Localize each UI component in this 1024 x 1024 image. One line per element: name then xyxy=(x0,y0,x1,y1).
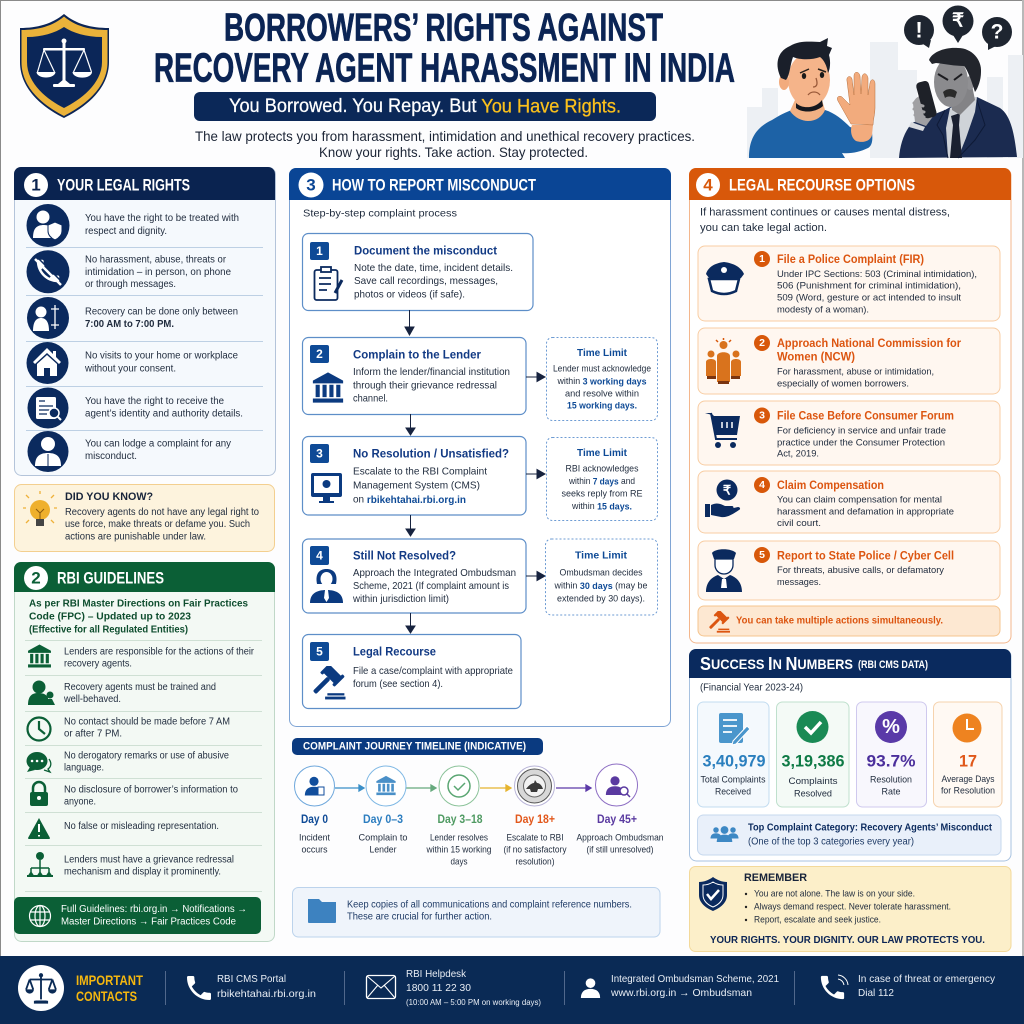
icon: speech bubbles: ? xyxy=(991,20,1003,44)
section 1 heading xyxy=(14,167,275,200)
step 5 box xyxy=(302,634,521,708)
day 3-18: within 15 working xyxy=(426,844,492,854)
option 2: especially of women borrowers. xyxy=(777,378,909,390)
contact: CMS portal: rbikehtahai.rbi.org.in xyxy=(217,988,316,1000)
icon: trained agent xyxy=(28,680,55,705)
time limit 2 xyxy=(546,338,658,420)
guideline: disclosure xyxy=(64,784,238,808)
option 3 xyxy=(698,401,1000,465)
step 3 box: Escalate to the RBI Complaint xyxy=(353,466,487,478)
day 0-3: Day 0–3 xyxy=(363,814,403,826)
icon: speech bubble xyxy=(26,752,51,772)
step 2 box: channel. xyxy=(353,394,388,404)
process subtitle: Step-by-step complaint process xyxy=(303,208,457,220)
arrow xyxy=(526,572,545,580)
day 18+: (if no satisfactory xyxy=(504,844,567,854)
option 3: Act, 2019. xyxy=(777,448,819,460)
right: no visits xyxy=(84,350,238,374)
step 5 box: 5 xyxy=(316,644,323,658)
step 1 box: Document the misconduct xyxy=(354,244,497,258)
step 5 box: forum (see section 4). xyxy=(353,679,443,690)
section 4 heading: LEGAL RECOURSE OPTIONS xyxy=(729,176,915,194)
contact: ombudsman: www.rbi.org.in → Ombudsman xyxy=(610,987,752,999)
subtitle: Know your rights. Take action. Stay protected. xyxy=(319,144,588,160)
stat: total complaints: 3,40,979 xyxy=(702,752,766,770)
title xyxy=(154,6,735,90)
step 4 box: Still Not Resolved? xyxy=(353,548,456,562)
icon: clipboard xyxy=(314,267,342,300)
option 2: 2 xyxy=(759,337,765,349)
callout: remember: YOUR RIGHTS. YOUR DIGNITY. OUR LAW PROTECTS YOU. xyxy=(710,934,985,946)
icon: person and time xyxy=(27,297,69,339)
icon: speech bubbles: ! xyxy=(915,18,923,42)
step 2 box: Complain to the Lender xyxy=(353,348,481,362)
right: recovery hours xyxy=(85,306,238,330)
header shield logo xyxy=(20,14,109,118)
right: no visits: No visits to your home or workplace xyxy=(85,350,238,362)
icon: complainant xyxy=(28,431,68,472)
icon: house xyxy=(26,342,68,384)
callout: remember xyxy=(690,866,1011,952)
panel: RBI guidelines xyxy=(14,562,275,942)
contact: CMS portal xyxy=(187,973,316,1000)
right: agent identity xyxy=(85,396,243,420)
illustration: city skyline xyxy=(747,42,1023,158)
recourse intro xyxy=(700,206,950,234)
option 4 xyxy=(698,471,1000,533)
right: respect: respect and dignity. xyxy=(85,226,167,237)
top complaint category xyxy=(698,815,1001,855)
note: keep copies: Keep copies of all communications and complaint reference numbers. xyxy=(347,900,632,910)
recourse intro: If harassment continues or causes mental distress, xyxy=(700,206,950,218)
option 3: practice under the Consumer Protection xyxy=(777,438,945,448)
subtitle xyxy=(195,128,695,160)
guideline: abusive language xyxy=(64,750,229,774)
contact: helpdesk: RBI Helpdesk xyxy=(406,968,467,980)
icon: bank green xyxy=(28,645,51,667)
illustration: angry recovery agent xyxy=(899,48,1017,158)
title: RECOVERY AGENT HARASSMENT IN INDIA xyxy=(154,44,735,90)
icon: no phone calls xyxy=(26,250,70,293)
stat: resolution rate: 93.7% xyxy=(866,752,916,770)
option 2: For harassment, abuse or intimidation, xyxy=(777,366,934,378)
panel: how to report misconduct xyxy=(289,168,671,726)
time limit 4: Time Limit xyxy=(575,550,627,562)
icon: folder xyxy=(308,899,336,923)
right: respect xyxy=(85,213,239,237)
guideline: lenders responsible: Lenders are responsible for the actions of their xyxy=(64,646,255,658)
step 4 box xyxy=(302,539,526,613)
option 4: 4 xyxy=(759,479,765,491)
stat: average days: for Resolution xyxy=(941,786,995,796)
stat: total complaints: Total Complaints xyxy=(700,774,766,786)
did you know text: DID YOU KNOW? xyxy=(65,491,153,503)
stat: total complaints xyxy=(698,702,769,807)
option 1: Under IPC Sections: 503 (Criminal intimidation), xyxy=(777,269,977,280)
option 2: Women (NCW) xyxy=(777,350,855,364)
contact: helpdesk: (10:00 AM – 5:00 PM on working days) xyxy=(406,997,541,1007)
step 1 box: Note the date, time, incident details. xyxy=(354,263,513,274)
option 2 xyxy=(698,328,1000,394)
step 4 box: Scheme, 2021 (If complaint amount is xyxy=(353,581,509,592)
timeline heading xyxy=(292,738,543,755)
did you know text: use force, make threats or defame you. Such xyxy=(65,519,250,530)
stat: average days: Average Days xyxy=(942,774,995,785)
right: recovery hours: 7:00 AM to 7:00 PM. xyxy=(85,319,174,330)
success heading: SUCCESS IN NUMBERS xyxy=(700,654,853,674)
timeline heading: COMPLAINT JOURNEY TIMELINE (INDICATIVE) xyxy=(303,740,526,752)
arrow xyxy=(406,613,415,633)
option 1: 1 xyxy=(759,253,765,265)
day 0 xyxy=(294,766,334,854)
right: recovery hours: Recovery can be done only between xyxy=(85,306,238,318)
guideline: lenders responsible xyxy=(64,646,255,670)
guidelines intro: (Effective for all Regulated Entities) xyxy=(29,624,188,636)
stat: complaints resolved: Complaints xyxy=(788,776,838,787)
contact: helpdesk: 1800 11 22 30 xyxy=(406,982,471,994)
day 0-3: Complain to xyxy=(358,832,408,842)
guideline: trained agents xyxy=(63,682,216,705)
time limit 3 xyxy=(546,438,658,520)
option 1: 509 (Word, gesture or act intended to insult xyxy=(777,292,961,304)
time limit 3: seeks reply from RE xyxy=(562,488,642,500)
right: respect: You have the right to be treated with xyxy=(85,213,239,224)
day 3-18: Lender resolves xyxy=(430,832,488,842)
complaint journey timeline xyxy=(292,738,664,866)
day 18+ xyxy=(504,766,567,866)
contact: emergency: In case of threat or emergency xyxy=(858,973,996,985)
step 4 box: 4 xyxy=(316,548,323,562)
section 2 heading: RBI GUIDELINES xyxy=(57,568,164,588)
time limit 2: Lender must acknowledge xyxy=(553,364,651,374)
time limit 4: extended by 30 days). xyxy=(557,594,645,604)
success heading: (RBI CMS DATA) xyxy=(858,659,928,671)
step 1 box: photos or videos (if safe). xyxy=(354,290,465,300)
tagline pill: You Borrowed. You Repay. But You Have Rights. xyxy=(229,96,621,117)
full guidelines bar xyxy=(14,897,261,934)
guideline: grievance xyxy=(64,854,234,878)
icon: padlock xyxy=(30,782,48,806)
guideline: disclosure: anyone. xyxy=(64,796,96,808)
note: keep copies xyxy=(292,888,660,937)
step 4 box: within jurisdiction limit) xyxy=(352,594,449,605)
contact: helpdesk xyxy=(366,968,541,1007)
contact: ombudsman xyxy=(581,973,779,999)
callout: remember: Report, escalate and seek justice. xyxy=(754,914,881,926)
time limit 2: Time Limit xyxy=(577,347,627,359)
full guidelines bar: Full Guidelines: rbi.org.in → Notifications → xyxy=(61,904,247,915)
icon: speech bubbles: ₹ xyxy=(952,10,964,32)
right: lodge complaint: misconduct. xyxy=(85,451,137,462)
callout: remember: You are not alone. The law is on your side. xyxy=(754,888,915,900)
note: keep copies: These are crucial for further action. xyxy=(347,912,492,922)
title: BORROWERS’ RIGHTS AGAINST xyxy=(224,6,663,50)
day 0: Incident xyxy=(299,832,330,842)
option 3: File Case Before Consumer Forum xyxy=(777,408,954,422)
did you know text: Recovery agents do not have any legal right to xyxy=(65,507,259,518)
option 4: You can claim compensation for mental xyxy=(777,494,942,506)
option 3: 3 xyxy=(759,410,765,422)
step 5 box: File a case/complaint with appropriate xyxy=(353,666,513,677)
subtitle: The law protects you from harassment, intimidation and unethical recovery practices. xyxy=(195,128,695,144)
step 4 box: Approach the Integrated Ombudsman xyxy=(353,568,516,579)
day 0-3: Lender xyxy=(370,844,396,854)
stat: total complaints: Received xyxy=(715,786,751,798)
icon: shield check xyxy=(699,877,727,911)
icon: warning triangle xyxy=(28,818,50,839)
day 45+: Day 45+ xyxy=(597,814,637,826)
day 45+ xyxy=(576,764,664,854)
stat: complaints resolved xyxy=(776,702,849,807)
option 5 xyxy=(698,541,1000,600)
section 2 heading: 2 xyxy=(31,568,41,588)
arrow xyxy=(405,310,414,335)
guideline: lenders responsible: recovery agents. xyxy=(64,658,132,670)
option 1: File a Police Complaint (FIR) xyxy=(777,252,924,266)
tagline pill xyxy=(194,92,656,121)
time limit 4 xyxy=(546,539,658,615)
contact: emergency xyxy=(821,973,996,999)
icon: rupee in hand xyxy=(705,480,740,517)
day 45+: (if still unresolved) xyxy=(586,844,654,854)
arrow xyxy=(406,414,415,435)
time limit 2: 15 working days. xyxy=(567,400,637,412)
time limit 2: within 3 working days xyxy=(557,376,646,387)
stat: resolution rate xyxy=(856,702,926,807)
time limit 2: and resolve within xyxy=(565,388,639,400)
success heading xyxy=(689,649,1011,678)
option 5: messages. xyxy=(777,577,821,588)
option 5: Report to State Police / Cyber Cell xyxy=(777,548,954,562)
recourse intro: you can take legal action. xyxy=(700,222,827,234)
timeline arrows xyxy=(335,785,591,791)
icon: document and pen xyxy=(719,713,750,745)
option 4: civil court. xyxy=(777,518,821,529)
financial year: (Financial Year 2023-24) xyxy=(700,682,803,694)
footer heading: IMPORTANT xyxy=(76,972,143,988)
icon: monitor xyxy=(311,473,342,503)
step 1 box xyxy=(302,234,533,310)
icon: clock xyxy=(28,718,50,740)
stat: average days: 17 xyxy=(959,752,977,770)
illustration: borrower raising hand xyxy=(749,38,875,158)
callout: remember: REMEMBER xyxy=(744,872,807,884)
day 18+: Escalate to RBI xyxy=(506,832,564,842)
time limit 4: within 30 days (may be xyxy=(554,580,648,592)
right: agent identity: agent’s identity and authority details. xyxy=(85,408,243,420)
stat: resolution rate: Resolution xyxy=(870,774,912,786)
right: lodge complaint xyxy=(85,438,231,462)
section 4 heading xyxy=(689,168,1011,200)
section 1 heading: YOUR LEGAL RIGHTS xyxy=(57,176,190,194)
option 4: Claim Compensation xyxy=(777,478,884,492)
day 0: occurs xyxy=(302,844,328,854)
section 3 heading: HOW TO REPORT MISCONDUCT xyxy=(332,176,536,194)
day 3-18: Day 3–18 xyxy=(438,814,483,826)
day 45+: Approach Ombudsman xyxy=(576,832,664,842)
option 5: 5 xyxy=(759,549,765,561)
option 3: For deficiency in service and unfair trade xyxy=(777,426,946,436)
stat: average days xyxy=(934,702,1002,807)
icon: speech bubbles xyxy=(904,6,1012,50)
right: agent identity: You have the right to receive the xyxy=(85,396,224,407)
icon: police cap xyxy=(706,262,744,294)
full guidelines bar: Master Directions → Fair Practices Code xyxy=(61,916,236,928)
step 3 box xyxy=(302,436,526,515)
guidelines intro: Code (FPC) – Updated up to 2023 xyxy=(29,612,191,622)
right: no harassment xyxy=(85,254,231,290)
day 18+: resolution) xyxy=(516,856,554,866)
option 4: harassment and defamation in appropriate xyxy=(777,506,954,518)
guideline: contact hours: or after 7 PM. xyxy=(64,728,122,740)
guideline: abusive language: No derogatory remarks or use of abusive xyxy=(64,750,229,762)
icon: ombudsman xyxy=(310,569,343,603)
icon: light bulb xyxy=(23,491,57,526)
footer logo xyxy=(18,965,64,1011)
contact: emergency: Dial 112 xyxy=(858,987,894,999)
guidelines intro xyxy=(29,598,248,636)
icon: women group xyxy=(706,338,741,384)
step 1 box: Save call recordings, messages, xyxy=(354,276,498,287)
option 2: Approach National Commission for xyxy=(777,336,961,350)
step 3 box: No Resolution / Unsatisfied? xyxy=(353,446,509,460)
arrow xyxy=(526,470,545,478)
arrow xyxy=(526,372,545,382)
time limit 3: within 7 days and xyxy=(568,476,635,487)
stat: resolution rate: Rate xyxy=(882,786,900,798)
right: no harassment: intimidation – in person, on phone xyxy=(85,267,231,278)
day 3-18: days xyxy=(450,856,468,866)
option 5: For threats, abusive calls, or defamatory xyxy=(777,565,944,576)
guidelines intro: As per RBI Master Directions on Fair Practices xyxy=(29,598,248,610)
step 2 box: 2 xyxy=(316,347,323,361)
top complaint category: Top Complaint Category: Recovery Agents’ Misconduct xyxy=(748,822,993,834)
icon: police officer xyxy=(706,549,742,592)
contact: CMS portal: RBI CMS Portal xyxy=(217,973,286,985)
footer heading: CONTACTS xyxy=(76,988,137,1004)
icon: scales of justice xyxy=(36,38,92,87)
time limit 3: within 15 days. xyxy=(571,501,632,512)
footer: important contacts xyxy=(0,956,1024,1024)
option 1 xyxy=(698,246,1000,321)
stat: complaints resolved: Resolved xyxy=(794,788,832,800)
icon: rupee in hand: ₹ xyxy=(723,482,732,498)
icon: bank xyxy=(313,372,343,403)
right: no harassment: or through messages. xyxy=(85,279,176,290)
time limit 4: Ombudsman decides xyxy=(560,568,643,578)
step 1 box: 1 xyxy=(316,244,323,258)
arrow xyxy=(406,515,415,536)
right: no harassment: No harassment, abuse, threats or xyxy=(85,254,227,266)
option 1: modesty of a woman). xyxy=(777,304,869,316)
step 2 box: Inform the lender/financial institution xyxy=(353,367,510,378)
icon: shopping cart xyxy=(705,413,740,448)
guideline: misleading: No false or misleading representation. xyxy=(64,821,219,832)
icon: hierarchy xyxy=(27,852,53,877)
panel: legal recourse options xyxy=(689,168,1011,643)
option 1: 506 (Punishment for criminal intimidation), xyxy=(777,280,961,292)
section 2 heading xyxy=(14,562,275,592)
guideline: abusive language: language. xyxy=(64,762,104,774)
guideline: trained agents: well-behaved. xyxy=(63,694,121,705)
guideline: disclosure: No disclosure of borrower’s information to xyxy=(64,784,238,796)
icon: people group xyxy=(710,826,738,842)
right: no visits: without your consent. xyxy=(84,364,176,374)
section 3 heading xyxy=(289,168,671,200)
step 3 box: 3 xyxy=(316,446,323,460)
day 0: Day 0 xyxy=(301,814,328,826)
step 3 box: Management System (CMS) xyxy=(353,480,480,492)
callout: remember: Always demand respect. Never tolerate harassment. xyxy=(754,902,951,912)
step 2 box: through their grievance redressal xyxy=(353,380,497,392)
step 5 box: Legal Recourse xyxy=(353,644,436,658)
contact: ombudsman: Integrated Ombudsman Scheme, 2021 xyxy=(611,973,779,985)
panel: your legal rights xyxy=(14,167,276,476)
guideline: grievance: mechanism and display it prominently. xyxy=(64,866,221,878)
guideline: contact hours xyxy=(64,716,230,740)
did you know text xyxy=(65,491,259,542)
icon: gavel xyxy=(307,662,346,700)
day 3-18 xyxy=(426,766,492,866)
guideline: grievance: Lenders must have a grievance redressal xyxy=(64,854,234,866)
stat: complaints resolved: 3,19,386 xyxy=(782,752,844,770)
panel: success in numbers xyxy=(689,649,1011,861)
icon: identity document xyxy=(28,388,68,428)
step 2 box xyxy=(302,338,526,414)
callout: did you know xyxy=(14,484,274,552)
guideline: trained agents: Recovery agents must be trained and xyxy=(64,682,216,693)
right: lodge complaint: You can lodge a complaint for any xyxy=(85,438,231,450)
top complaint category: (One of the top 3 categories every year) xyxy=(748,836,914,848)
section 4 heading: 4 xyxy=(703,176,713,194)
day 18+: Day 18+ xyxy=(515,814,555,826)
section 1 heading: 1 xyxy=(31,176,41,194)
time limit 3: Time Limit xyxy=(577,447,627,459)
day 0-3 xyxy=(358,766,408,854)
step 3 box: on rbikehtahai.rbi.org.in xyxy=(353,494,466,506)
footer heading xyxy=(76,972,143,1004)
section 3 heading: 3 xyxy=(306,176,316,194)
guideline: contact hours: No contact should be made before 7 AM xyxy=(64,716,230,728)
time limit 3: RBI acknowledges xyxy=(566,464,639,474)
callout: multiple actions xyxy=(698,606,1000,636)
callout: multiple actions: You can take multiple actions simultaneously. xyxy=(736,616,943,626)
stat: resolution rate: % xyxy=(882,716,900,738)
icon: person with shield xyxy=(26,204,70,247)
did you know text: actions are punishable under law. xyxy=(65,532,206,542)
